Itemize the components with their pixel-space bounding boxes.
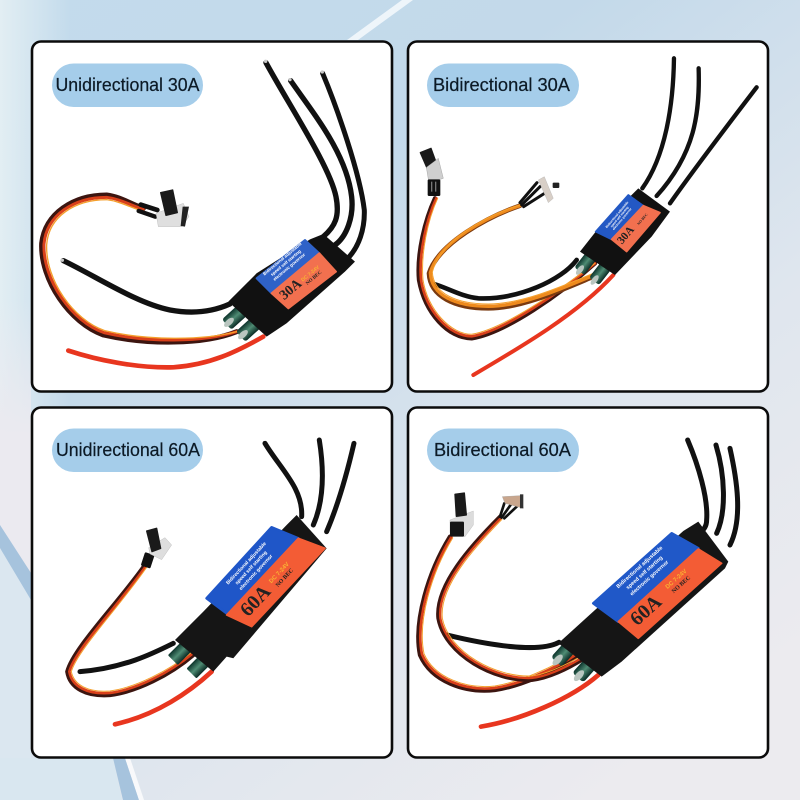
ESC product photo 30A unidirectional: electronic governor bbox=[272, 252, 306, 282]
label: Bidirectional 30A bbox=[427, 64, 579, 107]
ESC product photo 60A unidirectional: Bidirectional adjustable bbox=[225, 541, 268, 586]
ESC product photo 60A bidirectional: Bidirectional adjustable bbox=[616, 545, 664, 590]
panel: Bidirectional 60A bbox=[408, 408, 768, 758]
ESC product photo 60A unidirectional: NO BEC bbox=[275, 568, 295, 589]
ESC product photo 60A bidirectional: NO BEC bbox=[671, 575, 692, 595]
panel: Unidirectional 60A bbox=[32, 408, 392, 758]
label: Bidirectional 30A: Bidirectional 30A bbox=[433, 74, 571, 95]
ESC product photo 30A unidirectional: DC 7-24V bbox=[300, 264, 321, 283]
ESC product photo 30A bidirectional: Bidirectional adjustable bbox=[605, 200, 629, 229]
ESC product photo 60A bidirectional: electronic governor bbox=[629, 560, 670, 597]
ESC product photo 30A bidirectional: NO BEC bbox=[637, 212, 649, 226]
ESC product photo 60A unidirectional: DC 7-24V bbox=[268, 562, 291, 585]
ESC product photo 60A bidirectional bbox=[418, 440, 738, 727]
label: Bidirectional 60A: Bidirectional 60A bbox=[434, 439, 572, 460]
ESC product photo 30A bidirectional: speed self starting bbox=[609, 205, 630, 228]
ESC product photo 60A unidirectional bbox=[67, 440, 354, 724]
ESC product photo 60A unidirectional: speed self starting bbox=[234, 550, 269, 586]
label: Unidirectional 60A: Unidirectional 60A bbox=[56, 439, 201, 460]
ESC product photo 60A bidirectional: speed self starting bbox=[625, 555, 664, 591]
ESC product photo 30A unidirectional: NO BEC bbox=[305, 270, 323, 286]
label: Unidirectional 30A bbox=[52, 64, 203, 107]
ESC product photo 60A bidirectional: 60A bbox=[626, 590, 667, 630]
ESC product photo 60A unidirectional: electronic governor bbox=[238, 554, 274, 592]
label: Unidirectional 30A: Unidirectional 30A bbox=[56, 74, 200, 95]
label: Unidirectional 60A bbox=[52, 428, 203, 472]
ESC product photo 30A bidirectional: electronic governor bbox=[612, 206, 633, 231]
ESC product photo 60A bidirectional: DC 7-24V bbox=[665, 569, 688, 591]
label: Bidirectional 60A bbox=[427, 428, 579, 472]
ESC product photo 30A unidirectional: 30A bbox=[277, 276, 305, 303]
ESC product photo 30A unidirectional: speed self starting bbox=[269, 248, 302, 277]
ESC product photo 30A bidirectional: 30A bbox=[615, 223, 637, 247]
ESC product photo 30A unidirectional: Bidirectional adjustable bbox=[262, 241, 303, 276]
panel: Bidirectional 30A bbox=[408, 42, 768, 392]
panel: Unidirectional 30A bbox=[32, 42, 392, 392]
ESC product photo 30A unidirectional bbox=[42, 60, 364, 367]
ESC product photo 60A unidirectional: 60A bbox=[236, 580, 276, 621]
ESC product photo 30A bidirectional bbox=[419, 58, 757, 375]
